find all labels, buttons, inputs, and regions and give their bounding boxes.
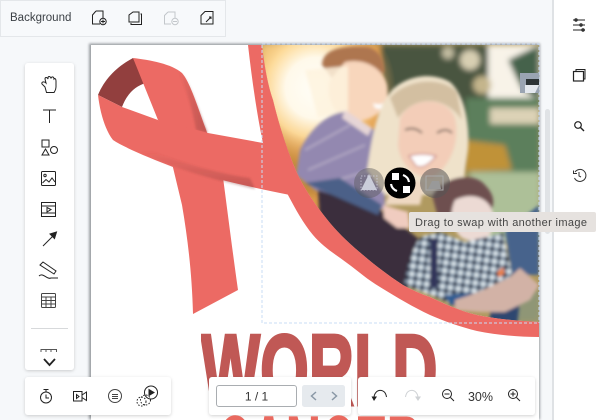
selection guides xyxy=(262,44,539,323)
icon: image xyxy=(42,172,56,186)
image handle xyxy=(520,73,539,93)
awareness ribbon xyxy=(98,58,290,314)
father hand xyxy=(455,268,539,312)
scrollbar xyxy=(545,109,550,234)
child head xyxy=(320,45,386,77)
icon: resize background xyxy=(201,12,213,24)
icon: undo xyxy=(372,390,386,401)
top background toolbar xyxy=(0,0,226,36)
plaid shirt xyxy=(404,232,512,310)
baby head xyxy=(431,176,496,212)
left tools panel xyxy=(25,63,74,370)
icon: record video xyxy=(74,392,86,401)
canvas page xyxy=(89,8,545,420)
grass xyxy=(470,172,540,242)
icon: shapes xyxy=(42,140,58,155)
icon: animation play xyxy=(137,386,158,406)
replace image button xyxy=(420,168,450,198)
icon: search xyxy=(575,122,584,131)
jeans below xyxy=(445,293,475,308)
ribbon strap xyxy=(133,58,208,135)
media toolbar xyxy=(25,377,171,415)
mother hair xyxy=(367,76,468,195)
icon: draw xyxy=(39,262,58,278)
zoom level: 30% xyxy=(468,390,493,404)
neck xyxy=(385,178,425,205)
icon: zoom in xyxy=(508,390,520,401)
icon: text tool xyxy=(43,110,56,123)
page number input xyxy=(216,386,296,406)
icon: video xyxy=(42,202,56,216)
icon: remove background xyxy=(164,12,178,25)
photo of mother with two children xyxy=(262,45,539,322)
previous and next buttons xyxy=(302,385,345,407)
icon: history xyxy=(574,169,586,181)
mother face xyxy=(398,102,456,178)
icon: comment xyxy=(108,390,122,402)
icon: redo xyxy=(406,390,421,401)
ribbon band xyxy=(98,95,290,195)
icon: settings sliders xyxy=(573,19,585,31)
icon: timer xyxy=(40,390,52,403)
hand xyxy=(383,205,410,228)
tooltip xyxy=(409,212,596,232)
icon: arrow xyxy=(43,232,56,246)
trees xyxy=(378,45,490,170)
icon: hand xyxy=(42,76,56,92)
denim jacket xyxy=(296,112,385,210)
icon: more tools chevron xyxy=(41,349,56,365)
icon: duplicate background xyxy=(129,12,142,24)
label: Background: Background xyxy=(10,12,71,24)
undo and zoom toolbar xyxy=(358,377,535,415)
icon: zoom out xyxy=(442,390,454,401)
tooltip: Drag to swap with another image xyxy=(415,217,587,229)
swap image button xyxy=(384,168,416,198)
icon: layers copy xyxy=(574,70,585,81)
icon: table xyxy=(42,294,56,308)
image crop button xyxy=(354,168,384,198)
page number input: 1 / 1 xyxy=(245,390,268,404)
coral arc xyxy=(248,45,539,337)
dark clothing xyxy=(318,190,420,295)
left warm background xyxy=(262,45,380,235)
icon: add background xyxy=(92,11,106,25)
jeans right xyxy=(505,205,539,275)
right side panel xyxy=(552,0,600,420)
page navigator xyxy=(209,377,351,415)
ribbon left leg xyxy=(170,155,238,314)
ribbon loop back xyxy=(98,58,146,107)
